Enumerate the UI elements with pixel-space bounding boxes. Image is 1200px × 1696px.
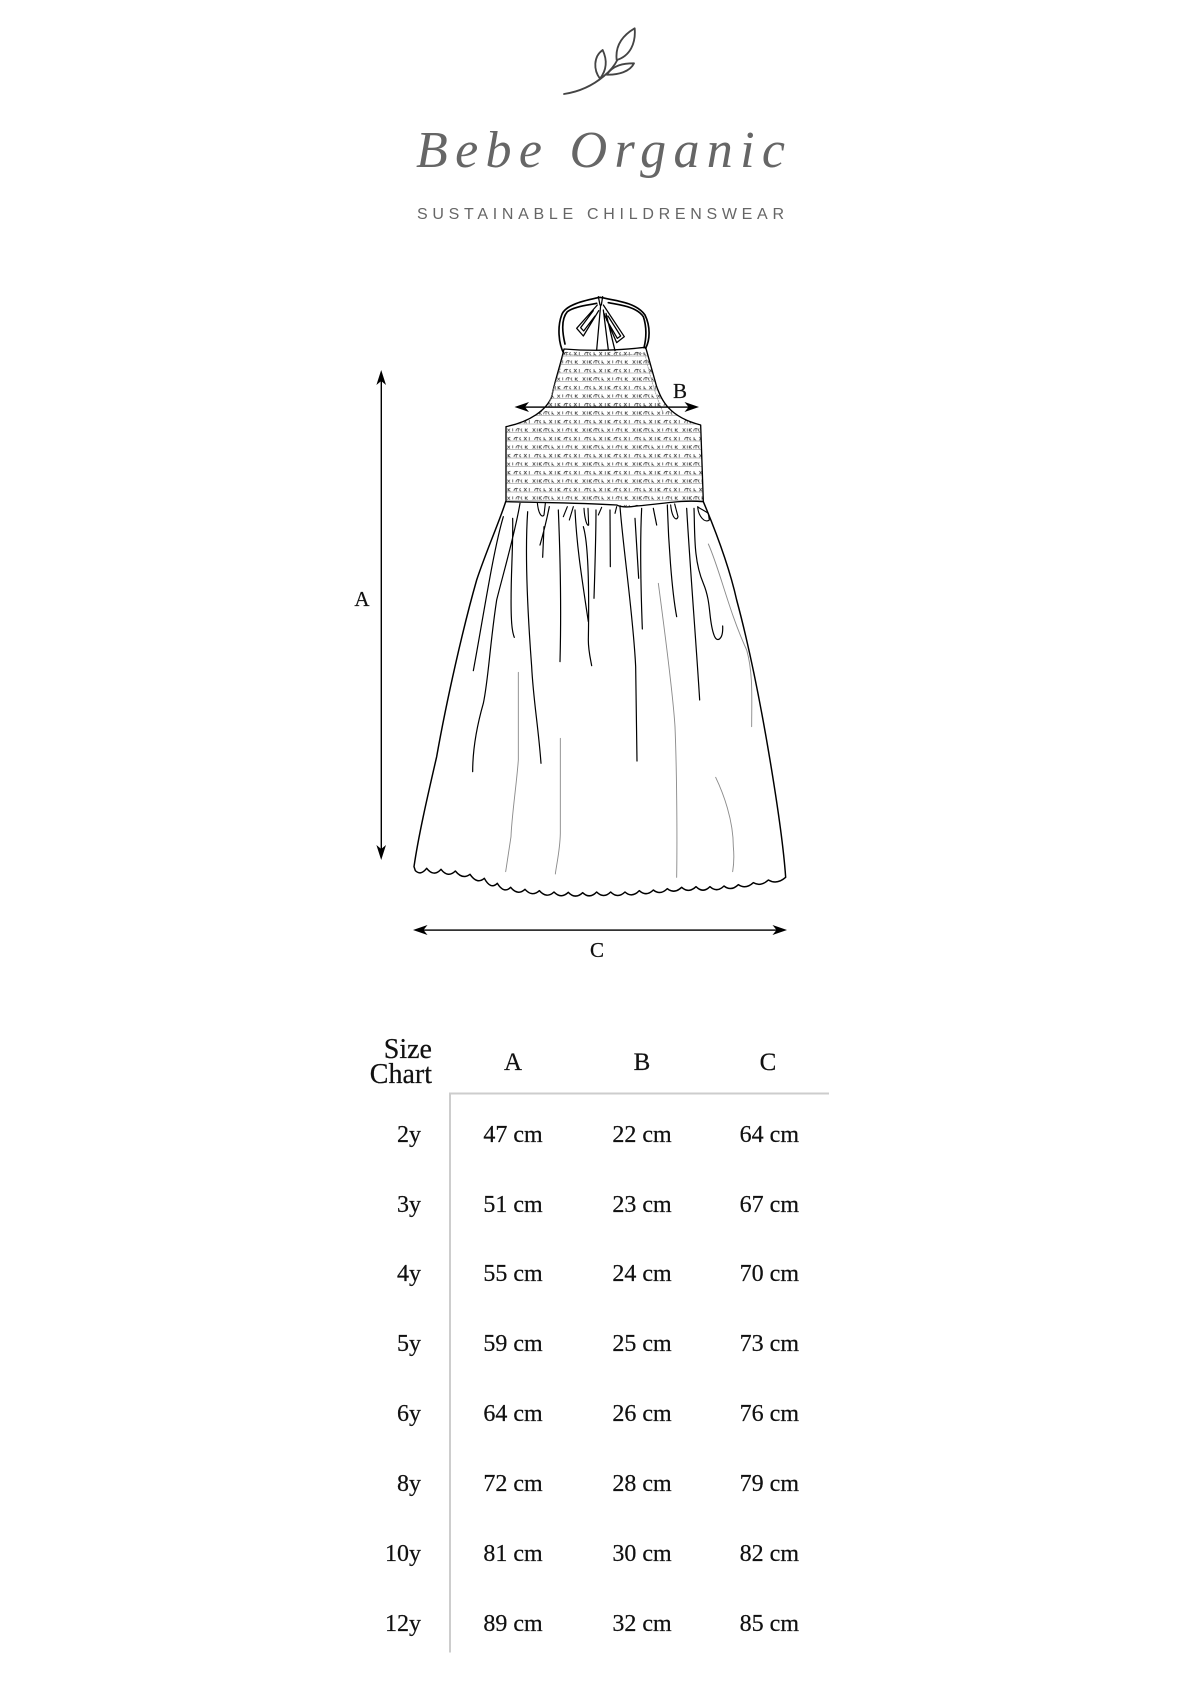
row: 4y: 24 cm xyxy=(612,1261,672,1287)
row: 3y: 23 cm xyxy=(612,1192,672,1218)
row: 5y xyxy=(397,1331,799,1357)
skirt xyxy=(414,502,786,896)
armhole stitching xyxy=(548,353,663,413)
row: 3y: 51 cm xyxy=(483,1192,543,1218)
icon: leaf sprig xyxy=(564,28,635,94)
arrow A: length xyxy=(376,370,386,860)
size chart table xyxy=(370,1034,829,1652)
label B: B xyxy=(673,379,687,403)
row: 2y: 2y xyxy=(397,1122,421,1148)
row: 12y: 12y xyxy=(385,1611,421,1637)
row: 8y: 79 cm xyxy=(740,1471,799,1497)
row: 4y: 70 cm xyxy=(740,1261,799,1287)
light fabric folds xyxy=(506,544,752,877)
row: 8y: 72 cm xyxy=(483,1471,543,1497)
row: 6y xyxy=(397,1401,799,1427)
arrow C: hem width xyxy=(413,925,787,935)
row: 10y: 82 cm xyxy=(740,1541,799,1567)
logo: Bebe Organic brand mark xyxy=(416,28,785,223)
row: 2y: 47 cm xyxy=(483,1122,543,1148)
column headers: C xyxy=(760,1049,776,1076)
row: 10y: 30 cm xyxy=(612,1541,672,1567)
tagline: SUSTAINABLE CHILDRENSWEAR xyxy=(417,206,784,223)
row: 6y: 6y xyxy=(397,1401,421,1427)
row: 5y: 5y xyxy=(397,1331,421,1357)
row: 12y: 85 cm xyxy=(740,1611,799,1637)
row: 4y: 55 cm xyxy=(483,1261,543,1287)
neck tie bow xyxy=(577,297,624,351)
row: 12y: 89 cm xyxy=(483,1611,543,1637)
row: 4y: 4y xyxy=(397,1261,421,1287)
row: 10y: 81 cm xyxy=(483,1541,543,1567)
row: 10y xyxy=(385,1541,799,1567)
column headers: B xyxy=(634,1049,650,1076)
row: 5y: 73 cm xyxy=(740,1331,799,1357)
column headers xyxy=(504,1049,776,1076)
brand name: Bebe Organic xyxy=(416,122,785,179)
table title: Size xyxy=(384,1034,432,1065)
column headers: A xyxy=(504,1049,522,1076)
smocked bodice xyxy=(506,347,703,507)
dark fabric folds xyxy=(473,503,723,772)
halter strap xyxy=(559,297,649,354)
row: 2y: 64 cm xyxy=(740,1122,799,1148)
row: 6y: 64 cm xyxy=(483,1401,543,1427)
row: 5y: 59 cm xyxy=(483,1331,543,1357)
dress technical drawing with measurements xyxy=(354,297,787,962)
row: 8y xyxy=(397,1471,799,1497)
row: 6y: 26 cm xyxy=(612,1401,672,1427)
row: 6y: 76 cm xyxy=(740,1401,799,1427)
table title: Chart xyxy=(370,1059,432,1090)
table rules xyxy=(449,1092,829,1652)
row: 3y xyxy=(397,1192,799,1218)
row: 3y: 3y xyxy=(397,1192,421,1218)
table title xyxy=(370,1034,432,1090)
label C: C xyxy=(590,938,604,962)
row: 12y xyxy=(385,1611,799,1637)
row: 2y xyxy=(397,1122,799,1148)
label A: A xyxy=(354,587,370,611)
row: 12y: 32 cm xyxy=(612,1611,672,1637)
arrow B: chest width xyxy=(514,402,699,412)
row: 5y: 25 cm xyxy=(612,1331,672,1357)
row: 2y: 22 cm xyxy=(612,1122,672,1148)
waist gathers and pocket xyxy=(537,503,709,525)
bodice and halter neck xyxy=(506,297,703,507)
skirt outline and scalloped hem xyxy=(414,502,786,896)
row: 8y: 8y xyxy=(397,1471,421,1497)
row: 4y xyxy=(397,1261,799,1287)
row: 8y: 28 cm xyxy=(612,1471,672,1497)
row: 3y: 67 cm xyxy=(740,1192,799,1218)
row: 10y: 10y xyxy=(385,1541,421,1567)
